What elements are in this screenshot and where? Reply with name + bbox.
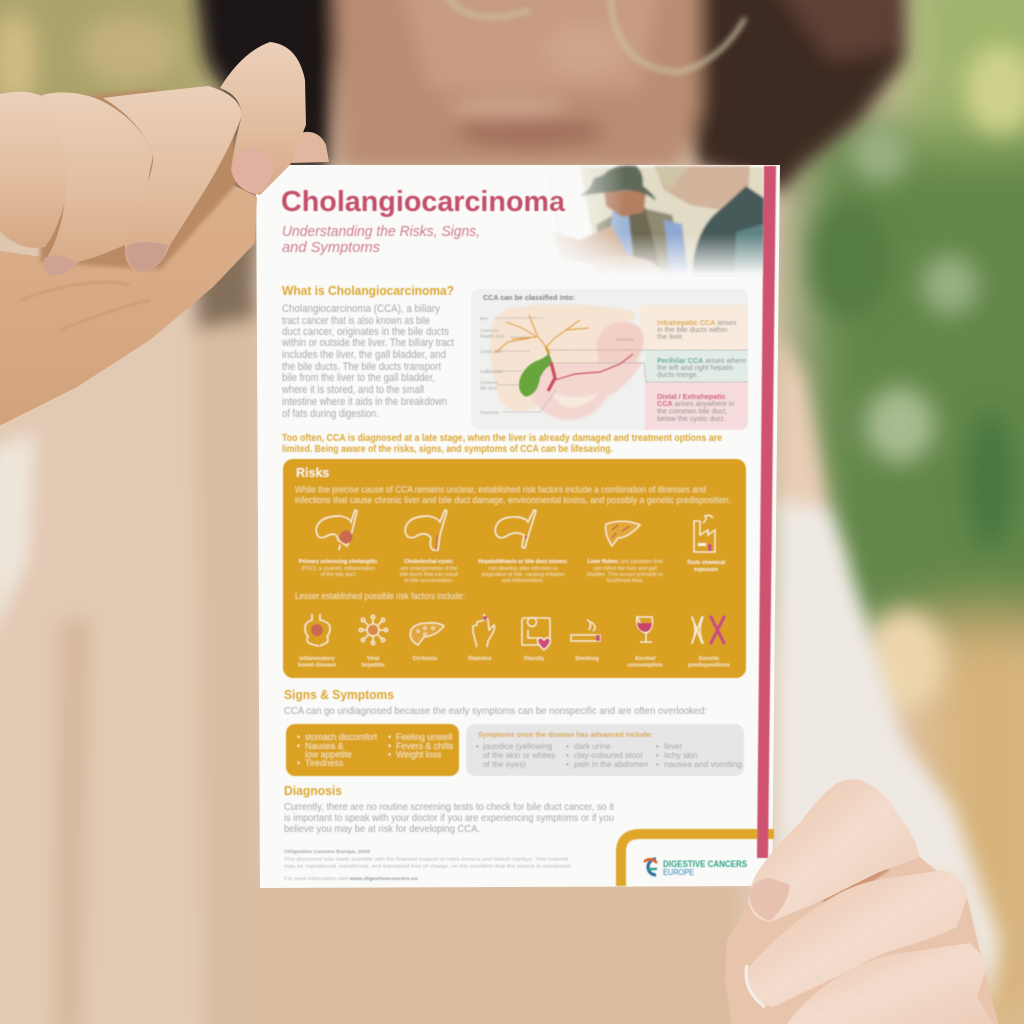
logo: digestive cancers europe: EUROPE <box>663 868 694 877</box>
footer credits <box>284 848 572 882</box>
icon: toxic chemical exposure <box>694 515 715 552</box>
panel: early symptoms: Weight loss <box>396 750 442 760</box>
panel: advanced symptoms <box>466 724 744 776</box>
panel: early symptoms: • <box>388 750 391 760</box>
text: diagnosis body <box>284 802 614 835</box>
face <box>335 0 700 170</box>
text: diagnosis body: is important to speak with your doctor if you are experiencing symptoms or if you <box>284 813 614 824</box>
caption: toxic chemical exposure: Toxic chemical <box>687 560 726 566</box>
icon: cirrhosis <box>410 623 444 645</box>
caption: choledochal cysts: in bile accumulation. <box>405 578 453 584</box>
finger: lower <box>783 943 997 1024</box>
panel: early symptoms: • <box>297 732 300 742</box>
caption: choledochal cysts <box>400 559 459 584</box>
callout: late diagnosis: Too often, CCA is diagnosed at a late stage, when the liver is already damaged and treatment options are <box>282 433 722 444</box>
caption: alcohol consumption: Alcohol <box>635 656 656 662</box>
arm and hands <box>552 226 628 264</box>
caption: toxic chemical exposure: exposure <box>694 567 718 573</box>
red stripe over frame <box>757 825 768 858</box>
panel: advanced symptoms: clay-coloured stool <box>574 751 642 760</box>
icon: hepatolithiasis <box>495 510 536 548</box>
caption: hepatolithiasis: Hepatolithiasis or bile duct stones: <box>478 559 568 565</box>
panel: advanced symptoms: fever <box>664 742 682 751</box>
text block: definition: within or outside the liver. The biliary tract <box>281 337 454 349</box>
man 2 <box>655 166 750 210</box>
panel: early symptoms: • <box>297 758 300 768</box>
text block: definition: tract cancer that is also known as bile <box>282 315 430 327</box>
red vertical stripe <box>757 166 776 858</box>
heading: what is cholangiocarcinoma: What is Cholangiocarcinoma? <box>282 284 454 298</box>
liver <box>490 304 636 411</box>
icon: viral hepatitis <box>359 615 388 645</box>
icon: wine glass <box>637 617 652 642</box>
caption: choledochal cysts: Choledochal cysts: <box>404 559 454 565</box>
anatomy diagram <box>490 304 644 420</box>
caption: liver flukes: can infect the liver and gall <box>593 566 657 572</box>
label: intrahepatic CCA <box>657 318 737 341</box>
thumb <box>748 779 920 922</box>
sleeve <box>776 500 1000 1010</box>
caption: liver flukes: bladder. This occurs primarily in <box>587 572 663 578</box>
nail: thumb <box>232 148 273 194</box>
shirt <box>0 270 262 1024</box>
caption: alcohol consumption <box>627 656 663 668</box>
palm <box>0 183 257 428</box>
paper sheet <box>256 165 780 888</box>
label: perihilar CCA: Perihilar CCA arises where <box>657 356 746 365</box>
logo frame <box>621 834 774 886</box>
label: intrahepatic CCA: in the bile ducts within <box>657 325 727 334</box>
panel: early symptoms <box>286 724 459 776</box>
text block: definition: includes the liver, the gall bladder, and <box>282 349 446 361</box>
dotted level lines <box>547 350 748 382</box>
caption: inflammatory bowel disease <box>298 656 336 668</box>
panel: advanced symptoms: • <box>566 760 569 769</box>
caption: viral hepatitis: Viral <box>367 656 379 662</box>
caption: hepatolithiasis <box>478 559 568 584</box>
caption: obesity: Obesity <box>524 656 545 662</box>
panel: advanced symptoms: jaundice (yellowing <box>482 742 553 751</box>
classification band: intrahepatic <box>640 305 748 350</box>
icon: primary sclerosing cholangitis <box>316 510 357 550</box>
panel: CCA classification: liver <box>480 316 489 321</box>
logo: digestive cancers europe <box>644 859 747 877</box>
title: Cholangiocarcinoma <box>281 186 566 218</box>
label: perihilar CCA <box>657 356 746 379</box>
text block: definition: the bile ducts. The bile ducts transport <box>282 361 441 373</box>
footer credits: For more information visit www.digestivecancers.eu <box>284 876 418 882</box>
nail: thumb <box>749 878 790 921</box>
panel: early symptoms: • <box>388 732 391 742</box>
panel: CCA classification: bile duct <box>480 386 498 390</box>
text block: definition: where it is stored, and to the small <box>281 384 424 396</box>
callout: late diagnosis: limited. Being aware of the risks, signs, and symptoms of CCA can be lifesaving. <box>282 444 613 455</box>
caption: hepatolithiasis: can develop after infection or <box>488 566 558 572</box>
caption: hepatolithiasis: and inflammation. <box>502 578 544 584</box>
panel: CCA classification: Pancreas <box>480 410 500 415</box>
subtitle: Understanding the Risks, Signs, <box>282 224 480 240</box>
text block: definition: of fats during digestion. <box>282 408 379 420</box>
heading: diagnosis: Diagnosis <box>284 783 342 798</box>
leader lines and labels <box>494 318 556 412</box>
flyer page <box>256 165 780 888</box>
caption: PSC <box>299 559 377 578</box>
risks intro: While the precise cause of CCA remains unclear, established risk factors include a combination of illnesses and <box>295 484 706 494</box>
stomach <box>596 322 644 372</box>
panel: advanced symptoms: pain in the abdomen <box>574 760 649 769</box>
left hand holding the flyer <box>0 42 329 428</box>
risks intro <box>295 484 731 505</box>
pancreas and duodenum <box>532 362 642 420</box>
finger: ring <box>0 92 73 248</box>
text: diagnosis body: Currently, there are no routine screening tests to check for bile duct cancer, so it <box>284 802 614 813</box>
panel: early symptoms: Nausea & <box>305 741 344 751</box>
captions: lesser risk factors <box>298 656 730 668</box>
ring on finger <box>746 965 765 1007</box>
gallbladder <box>519 353 553 397</box>
callout: late diagnosis <box>282 433 722 455</box>
panel: early symptoms: stomach discomfort <box>305 732 378 742</box>
caption: choledochal cysts: bile ducts that can result <box>400 572 459 578</box>
heading: signs and symptoms: Signs & Symptoms <box>284 687 394 702</box>
panel: advanced symptoms: nausea and vomiting <box>664 760 742 769</box>
panel: early symptoms: Tiredness <box>305 758 344 768</box>
header photo: two men fishing <box>545 166 765 275</box>
panel: early symptoms: • <box>388 741 391 751</box>
text block: definition: intestine where it aids in the breakdown <box>282 396 447 408</box>
panel: CCA classification: Common <box>480 380 499 385</box>
panel: early symptoms: Feeling unwell <box>396 732 452 742</box>
icon: liver flukes <box>606 521 640 546</box>
panel: advanced symptoms: • <box>656 751 659 760</box>
logo: digestive cancers europe: DIGESTIVE CANCERS <box>663 859 747 869</box>
hair <box>195 0 345 170</box>
cavity between thumb and fingers <box>820 860 890 905</box>
panel: risks <box>283 459 746 678</box>
label: distal CCA: below the cystic duct. <box>657 414 725 423</box>
text: diagnosis body: believe you may be at risk for developing CCA. <box>284 824 480 835</box>
footer credits: ©Digestive Cancers Europe, 2020 <box>284 848 370 855</box>
caption: viral hepatitis <box>361 656 385 668</box>
label: perihilar CCA: ducts merge. <box>657 370 699 379</box>
label: distal CCA <box>657 392 735 423</box>
palm and lower fingers <box>725 857 1000 1024</box>
panel: CCA classification: Common <box>480 328 499 333</box>
lesser risk factors subheading: Lesser established possible risk factors include: <box>295 591 465 601</box>
label: intrahepatic CCA: Intrahepatic CCA arises <box>657 318 737 327</box>
icon: diabetes finger <box>473 614 495 647</box>
caption: smoking: Smoking <box>575 656 599 662</box>
risks intro: infections that cause chronic liver and bile duct damage, environmental toxins, and possibly a genetic predisposition. <box>295 495 731 505</box>
panel: advanced symptoms: dark urine <box>574 742 611 751</box>
panel: advanced symptoms: • <box>656 760 659 769</box>
caption: choledochal cysts: are enlargements of the <box>401 566 457 572</box>
advanced symptoms heading: Symptoms once the disease has advanced include: <box>478 730 653 739</box>
text block: definition <box>281 303 454 420</box>
footer credits: may be reproduced, transferred, and translated free of charge, on the condition that the source is mentioned. <box>284 864 572 870</box>
panel: CCA classification: Stomach <box>616 337 634 342</box>
classification band: perihilar <box>645 350 748 382</box>
subtitle <box>282 224 480 256</box>
label: distal CCA: CCA arises anywhere in <box>657 399 735 408</box>
panel: early symptoms: • <box>297 741 300 751</box>
caption: alcohol consumption: consumption <box>627 662 663 668</box>
caption: hepatolithiasis: stagnation of bile, causing irritation <box>481 572 565 578</box>
panel: advanced symptoms: of the eyes) <box>483 760 526 769</box>
caption: viral hepatitis: hepatitis <box>361 662 385 668</box>
panel: CCA classification: hepatic duct <box>480 334 505 338</box>
captions: established risk factors <box>299 559 726 584</box>
caption: liver flukes: Southeast Asia. <box>606 578 644 584</box>
panel: early symptoms: low appetite <box>305 750 352 760</box>
caption: liver flukes: Liver flukes: are parasites that <box>588 559 663 565</box>
man 1 face and hat <box>604 190 646 217</box>
right hand holding the flyer <box>725 779 1000 1024</box>
label: perihilar CCA: the left and right hepatic <box>657 363 734 372</box>
second finger behind thumb <box>290 132 329 163</box>
caption: inflammatory bowel disease: bowel disease <box>298 662 336 668</box>
finger: middle <box>747 870 967 1007</box>
label: distal CCA: the common bile duct, <box>657 406 727 416</box>
nail: index finger <box>126 242 168 272</box>
panel: advanced symptoms: itchy skin <box>664 751 698 760</box>
panel: early symptoms: Fevers & chills <box>396 741 454 751</box>
icon: choledochal cysts <box>405 510 447 550</box>
subtitle: and Symptoms <box>282 240 380 256</box>
icon: obesity scale <box>522 618 550 650</box>
panel heading: CCA can be classified into: <box>483 293 575 302</box>
panel: CCA classification <box>471 289 748 430</box>
caption: PSC: (PSC): a scarred, inflammation <box>301 566 375 572</box>
caption: liver flukes <box>587 559 663 584</box>
text block: definition: duct cancer, originates in the bile ducts <box>282 326 449 338</box>
dark creases behind fingers <box>40 90 240 270</box>
nail: middle finger <box>44 255 78 276</box>
logo mark <box>644 859 657 875</box>
panel: advanced symptoms: • <box>566 751 569 760</box>
classification band: distal <box>645 382 748 430</box>
text: signs intro: CCA can go undiagnosed because the early symptoms can be nonspecific and are often overlooked: <box>284 706 707 717</box>
panel: advanced symptoms: of the skin or whites <box>483 751 555 760</box>
caption: genetic predispositions: predispositions <box>688 662 730 668</box>
panel: CCA classification: Cystic duct <box>480 349 503 354</box>
risks heading: Risks <box>296 466 329 480</box>
panel: advanced symptoms: • <box>476 742 479 751</box>
caption: cirrhosis: Cirrhosis <box>413 656 437 662</box>
caption: inflammatory bowel disease: inflammatory <box>299 656 335 662</box>
panel: CCA classification: Gallbladder <box>480 369 504 374</box>
icon: chromosomes <box>692 617 724 643</box>
finger: index <box>103 86 242 272</box>
text block: definition: Cholangiocarcinoma (CCA), a biliary <box>282 303 441 315</box>
bile duct red <box>548 354 633 391</box>
caption: toxic chemical exposure <box>687 560 726 573</box>
caption: diabetes: Diabetes <box>468 656 492 662</box>
caption: PSC: Primary sclerosing cholangitis <box>299 559 377 565</box>
footer credits: This document was made possible with the financial support of Astra Zeneca and Daiichi Sankyo. This material <box>284 856 568 862</box>
caption: PSC: of the bile duct <box>320 572 356 578</box>
bile ducts yellow <box>496 315 589 354</box>
icon: intestine <box>305 614 330 646</box>
finger: middle <box>42 92 153 275</box>
man 1 body <box>596 205 688 274</box>
caption: genetic predispositions <box>688 656 730 668</box>
panel: advanced symptoms: • <box>566 742 569 751</box>
text block: definition: bile from the liver to the gall bladder, <box>282 372 435 384</box>
glasses <box>445 0 745 72</box>
thumb <box>220 42 306 195</box>
label: distal CCA: Distal / Extrahepatic <box>657 392 726 401</box>
label: intrahepatic CCA: the liver. <box>657 332 684 341</box>
icon: cigarette <box>571 620 600 641</box>
caption: genetic predispositions: Genetic <box>699 656 719 662</box>
panel: advanced symptoms: • <box>656 742 659 751</box>
